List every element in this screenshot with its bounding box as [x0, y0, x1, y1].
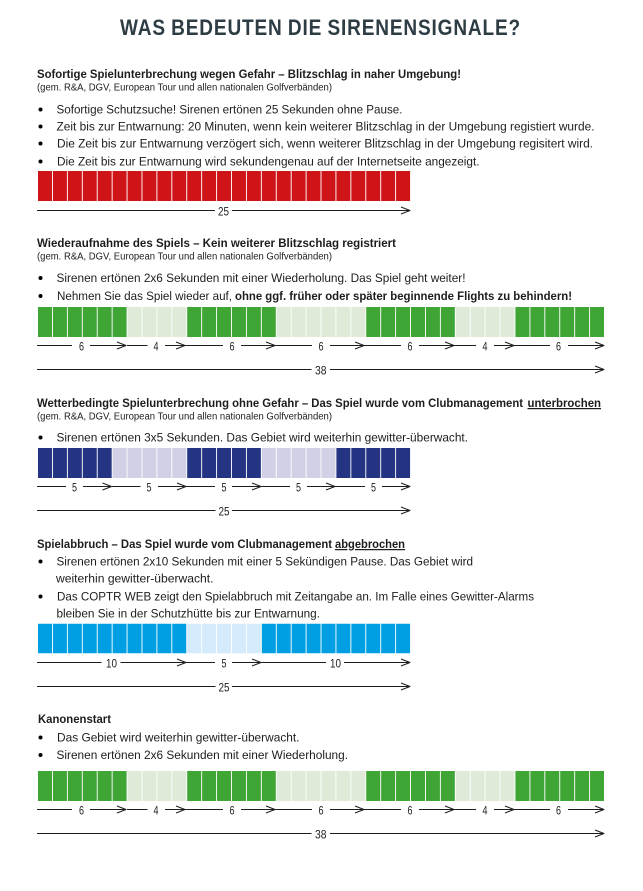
bullet list: Die Zeit bis zur Entwarnung verzögert sich, wenn weiterer Blitzschlag in der Umgebung regisitert wird.	[57, 136, 593, 150]
arrow: 25 total	[37, 504, 410, 518]
heading: wetterbedingte Spielunterbrechung: unterbrochen	[528, 396, 601, 410]
bullet list: Sofortige Schutzsuche! Sirenen ertönen 25 Sekunden ohne Pause.	[56, 102, 402, 116]
panel: Kanonenstart	[37, 712, 604, 842]
heading: Kanonenstart: Kanonenstart	[38, 712, 111, 726]
arrow: 25: 25	[218, 204, 229, 218]
bullet list: bleiben Sie in der Schutzhütte bis zur Entwarnung.	[56, 606, 320, 620]
arrows: segment durations	[37, 656, 410, 670]
arrow: 25	[37, 204, 410, 218]
panel: Wiederaufnahme des Spiels	[37, 236, 604, 378]
bullet list: Sirenen ertönen 2x10 Sekunden mit einer 5 Sekündigen Pause. Das Gebiet wird	[56, 554, 473, 568]
arrow: 38 total	[37, 828, 604, 842]
bullet list	[38, 730, 348, 762]
arrows: segment durations	[37, 804, 604, 818]
heading: Spielabbruch: abgebrochen	[335, 537, 405, 551]
bullet list	[38, 554, 534, 620]
heading: Wiederaufnahme: Wiederaufnahme des Spiels – Kein weiterer Blitzschlag registriert	[37, 236, 396, 250]
arrows: segment durations: 5	[371, 480, 376, 494]
bullet list: Sirenen ertönen 2x6 Sekunden mit einer Wiederholung.	[56, 748, 348, 762]
title: WAS BEDEUTEN DIE SIRENENSIGNALE?	[120, 15, 521, 40]
arrows: segment durations: 5	[72, 480, 77, 494]
arrow: 25 total	[37, 680, 410, 694]
arrows: segment durations: 4	[482, 804, 488, 818]
signal bar: blue pattern	[38, 624, 410, 653]
heading: wetterbedingte Spielunterbrechung: Wetterbedingte Spielunterbrechung ohne Gefahr – Das Spiel wurde vom Clubmanagement	[37, 396, 523, 410]
arrows: segment durations: 10	[330, 656, 341, 670]
arrow: 25 total: 25	[218, 504, 230, 518]
bullet list: Zeit bis zur Entwarnung: 20 Minuten, wenn kein weiterer Blitzschlag in der Umgebung registiert wurde.	[56, 120, 594, 134]
bullet list	[38, 102, 594, 168]
arrows: segment durations	[37, 480, 410, 494]
arrows: segment durations: 6	[408, 340, 413, 354]
arrow: 25 total: 25	[218, 680, 230, 694]
arrow: 38 total: 38	[315, 828, 327, 842]
subheading: Verbände: (gem. R&A, DGV, European Tour und allen nationalen Golfverbänden)	[37, 82, 332, 94]
arrows: segment durations: 4	[154, 340, 159, 354]
arrows: segment durations: 6	[318, 340, 324, 354]
bullet list	[38, 271, 572, 303]
arrows: segment durations: 5	[296, 480, 301, 494]
bullet list: Nehmen Sie das Spiel wieder auf,	[57, 289, 232, 303]
arrows: segment durations: 4	[482, 340, 488, 354]
arrow: 38 total: 38	[315, 364, 327, 378]
bullet list: ohne ggf. früher oder später beginnende Flights zu behindern!	[235, 289, 572, 303]
panel: sofortige Spielunterbrechung	[37, 67, 594, 218]
bullet list: Das COPTR WEB zeigt den Spielabbruch mit Zeitangabe an. Im Falle eines Gewitter-Alarms	[57, 590, 534, 604]
arrows: segment durations: 6	[79, 804, 84, 818]
bullet list: Sirenen ertönen 3x5 Sekunden. Das Gebiet wird weiterhin gewitter-überwacht.	[56, 430, 468, 444]
arrows: segment durations	[37, 340, 604, 354]
signal bar: green pattern	[38, 307, 604, 337]
arrows: segment durations: 5	[146, 480, 152, 494]
arrows: segment durations: 6	[556, 804, 561, 818]
heading: sofortige Spielunterbrechung: Sofortige Spielunterbrechung wegen Gefahr – Blitzschlag in naher Umgebung!	[37, 67, 461, 81]
arrow: 38 total	[37, 364, 604, 378]
signal bar: green pattern	[38, 771, 604, 801]
arrows: segment durations: 10	[106, 656, 117, 670]
arrows: segment durations: 6	[79, 340, 84, 354]
arrows: segment durations: 6	[230, 340, 235, 354]
signal bar: navy pattern	[38, 448, 410, 478]
arrows: segment durations: 5	[222, 656, 227, 670]
panel: wetterbedingte Spielunterbrechung	[37, 396, 601, 518]
arrows: segment durations: 6	[318, 804, 324, 818]
arrows: segment durations: 5	[222, 480, 227, 494]
subheading: Verbände: (gem. R&A, DGV, European Tour und allen nationalen Golfverbänden)	[37, 252, 332, 262]
arrows: segment durations: 6	[556, 340, 561, 354]
heading: Spielabbruch: Spielabbruch – Das Spiel wurde vom Clubmanagement	[37, 537, 332, 551]
subheading: Verbände: (gem. R&A, DGV, European Tour und allen nationalen Golfverbänden)	[37, 412, 332, 422]
panel: Spielabbruch	[37, 537, 534, 694]
arrows: segment durations: 4	[154, 804, 159, 818]
bullet list: weiterhin gewitter-überwacht.	[55, 572, 213, 586]
bullet list: Die Zeit bis zur Entwarnung wird sekundengenau auf der Internetseite angezeigt.	[57, 154, 480, 168]
signal bar: 25 seconds red	[38, 171, 410, 201]
arrows: segment durations: 6	[230, 804, 235, 818]
bullet list: Das Gebiet wird weiterhin gewitter-überwacht.	[57, 730, 300, 744]
arrows: segment durations: 6	[408, 804, 413, 818]
bullet list: Sirenen ertönen 2x6 Sekunden mit einer Wiederholung. Das Spiel geht weiter!	[56, 271, 466, 285]
